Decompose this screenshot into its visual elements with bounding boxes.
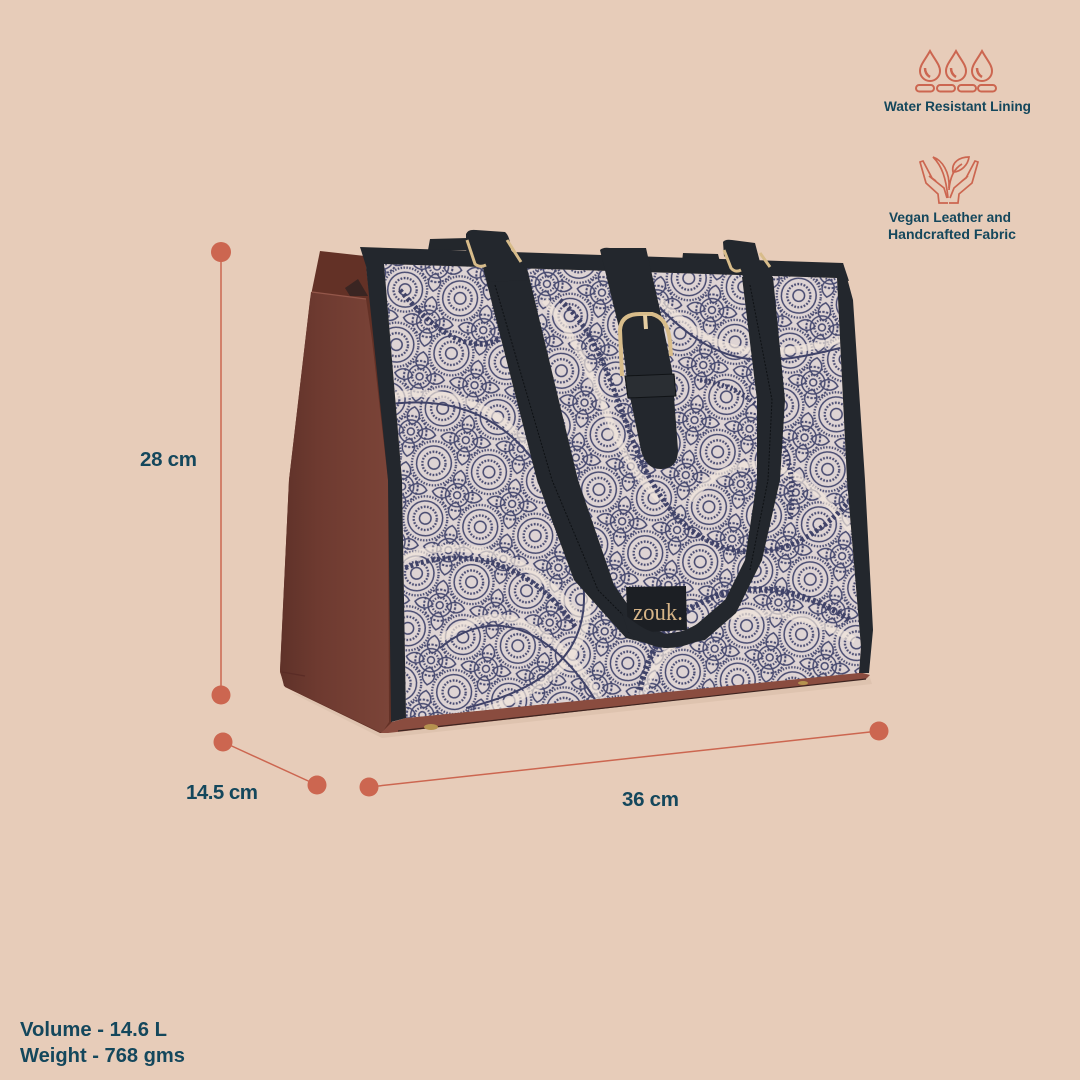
- front fabric panel with paisley print: [380, 260, 870, 725]
- label: vegan leather and handcrafted fabric: Vegan Leather and: [889, 210, 1011, 225]
- depth dimension 14.5 cm: [186, 732, 326, 804]
- strap tabs and gold rings: [466, 230, 773, 285]
- centre buckle strap: [600, 248, 678, 469]
- icon: hands holding plant: [920, 157, 978, 203]
- black leather frame: [360, 247, 873, 722]
- depth dimension 14.5 cm: 14.5 cm: [186, 781, 258, 804]
- height dimension 28 cm: 28 cm: [140, 448, 197, 471]
- volume and weight: Weight - 768 gms: [20, 1045, 185, 1067]
- width dimension 36 cm: 36 cm: [622, 788, 679, 811]
- soft floor shadow: [290, 672, 872, 738]
- zouk logo patch: [626, 586, 687, 633]
- shoulder strap: [483, 268, 785, 648]
- bag side gusset: [280, 251, 392, 733]
- back strap tabs behind the band: [428, 238, 720, 262]
- strap front section over logo: [622, 600, 735, 648]
- brass feet: [424, 724, 438, 730]
- zouk logo patch: zouk.: [633, 600, 683, 626]
- handbag photograph illustration: [280, 230, 873, 733]
- gold buckle: [620, 314, 671, 376]
- label: vegan leather and handcrafted fabric: Handcrafted Fabric: [888, 227, 1017, 242]
- bag base rim: [381, 672, 870, 733]
- volume and weight: Volume - 14.6 L: [20, 1019, 167, 1041]
- width dimension 36 cm: [360, 722, 888, 811]
- label: water resistant lining: Water Resistant Lining: [884, 99, 1031, 114]
- height dimension 28 cm: [140, 242, 231, 704]
- label: vegan leather and handcrafted fabric: [888, 210, 1017, 242]
- volume and weight: [20, 1019, 185, 1067]
- icon: water drops on fabric: [916, 51, 996, 92]
- keeper loop: [625, 374, 676, 398]
